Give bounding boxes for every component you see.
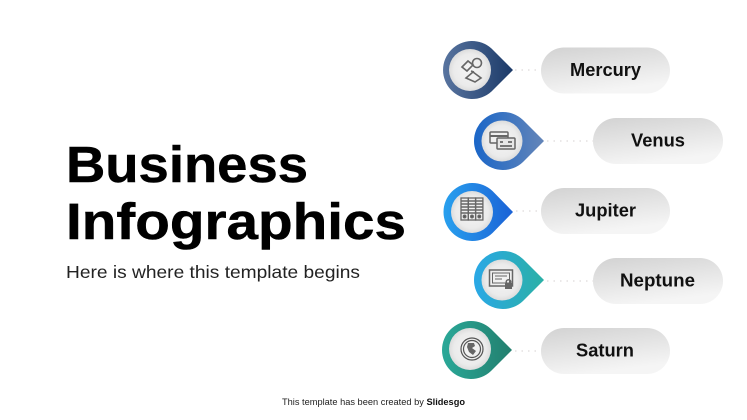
pin: Saturn: [442, 321, 512, 379]
subtitle: Here is where this template begins: [66, 262, 360, 282]
icon: Venus: [482, 120, 522, 162]
pill: Neptune: [593, 258, 723, 304]
label: Jupiter: Jupiter: [575, 200, 636, 220]
pill: Mercury: [541, 48, 670, 94]
label: Neptune: Neptune: [620, 270, 695, 290]
label: Saturn: Saturn: [576, 340, 634, 360]
row: Venus: [474, 112, 723, 170]
label: Mercury: Mercury: [570, 60, 641, 80]
pin: Venus: [474, 112, 544, 170]
pin: Jupiter: [444, 183, 513, 241]
title: Infographics: [66, 193, 406, 250]
row: Mercury: [443, 41, 670, 99]
title: Business: [66, 136, 308, 193]
pill: Venus: [593, 118, 723, 164]
row: Jupiter: [444, 183, 670, 241]
title: [66, 136, 406, 250]
row: Saturn: [442, 321, 670, 379]
label: Venus: Venus: [631, 130, 685, 150]
pill: Jupiter: [541, 188, 670, 234]
row: Neptune: [474, 251, 723, 309]
icon: Mercury: [449, 49, 491, 91]
pin: Neptune: [474, 251, 544, 309]
pill: Saturn: [541, 328, 670, 374]
icon: Neptune: [482, 260, 522, 300]
icon: Jupiter: [451, 191, 493, 233]
footer credit: This template has been created by Slidesgo: [282, 397, 466, 407]
pin: Mercury: [443, 41, 513, 99]
icon: Saturn: [449, 328, 491, 370]
